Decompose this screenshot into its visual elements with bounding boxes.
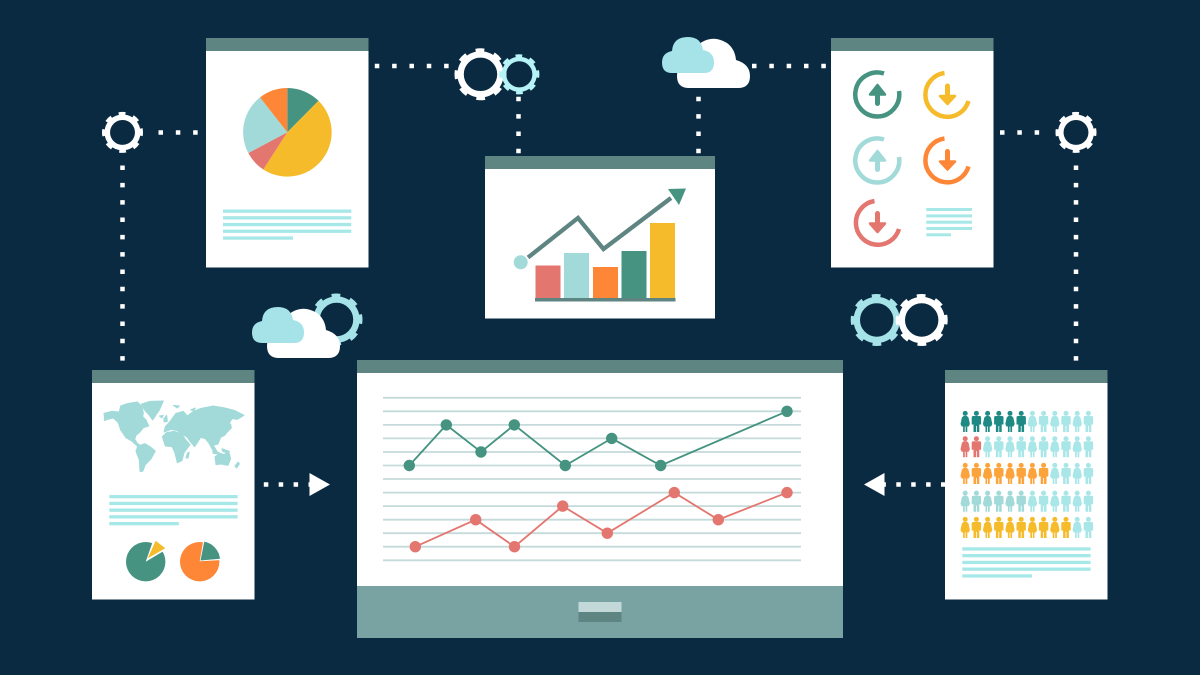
icon: green up arrow (855, 72, 899, 116)
trend arrow (514, 188, 686, 269)
icon: cyan gear behind cloud (312, 296, 360, 344)
icon: yellow down arrow (925, 73, 968, 117)
icon: white gear top (456, 50, 504, 98)
arrow: people panel to laptop (864, 473, 946, 496)
icon: white gear left (104, 114, 141, 151)
icon: white gear right (1057, 114, 1095, 151)
icon: cyan gear bottom right (853, 296, 901, 344)
icon: salmon down arrow (856, 201, 899, 245)
panel: laptop dashboard (357, 360, 843, 638)
panel: up and down icons report (831, 38, 994, 268)
line chart (383, 398, 801, 560)
icon: clouds bottom left (252, 307, 340, 358)
pictogram row 1 (960, 411, 1093, 432)
connector: cloud to top-right panel (752, 64, 826, 68)
connector: cloud to centre panel (696, 97, 701, 154)
pictogram row 2 (960, 436, 1093, 457)
icon: white gear bottom right (898, 296, 946, 344)
bar chart (535, 223, 676, 302)
connector: top-left panel to gears (375, 64, 449, 68)
pictogram row 5 (960, 517, 1093, 538)
pie: green with yellow slice (126, 538, 172, 581)
icon: cyan gear top (501, 56, 538, 93)
green series (404, 406, 793, 471)
panel: centre combo chart (485, 156, 715, 318)
pie: orange with green slice (180, 539, 222, 581)
laptop base (357, 586, 843, 638)
text lines (962, 547, 1091, 578)
icon: orange down arrow (925, 138, 968, 182)
connector: left gear to map panel (120, 166, 125, 362)
connector: right gear to people panel (1074, 166, 1078, 362)
icon: clouds top (662, 37, 750, 88)
panel: pie chart report (206, 38, 368, 268)
world map (104, 401, 244, 471)
connector: top-right panel to right gear (1000, 130, 1042, 135)
pictogram row 3 (960, 463, 1093, 484)
salmon series (410, 487, 793, 552)
text lines (926, 208, 972, 236)
pie chart (243, 88, 332, 177)
arrow: map panel to laptop (264, 473, 330, 496)
connector: gears to centre panel (516, 97, 521, 154)
text lines (223, 210, 351, 240)
panel: people pictogram report (945, 370, 1108, 600)
text lines (109, 495, 238, 525)
icon: light teal up arrow (855, 138, 899, 182)
connector: left gear to top-left panel (158, 130, 199, 135)
panel: world map report (92, 370, 254, 600)
pictogram row 4 (960, 491, 1093, 512)
